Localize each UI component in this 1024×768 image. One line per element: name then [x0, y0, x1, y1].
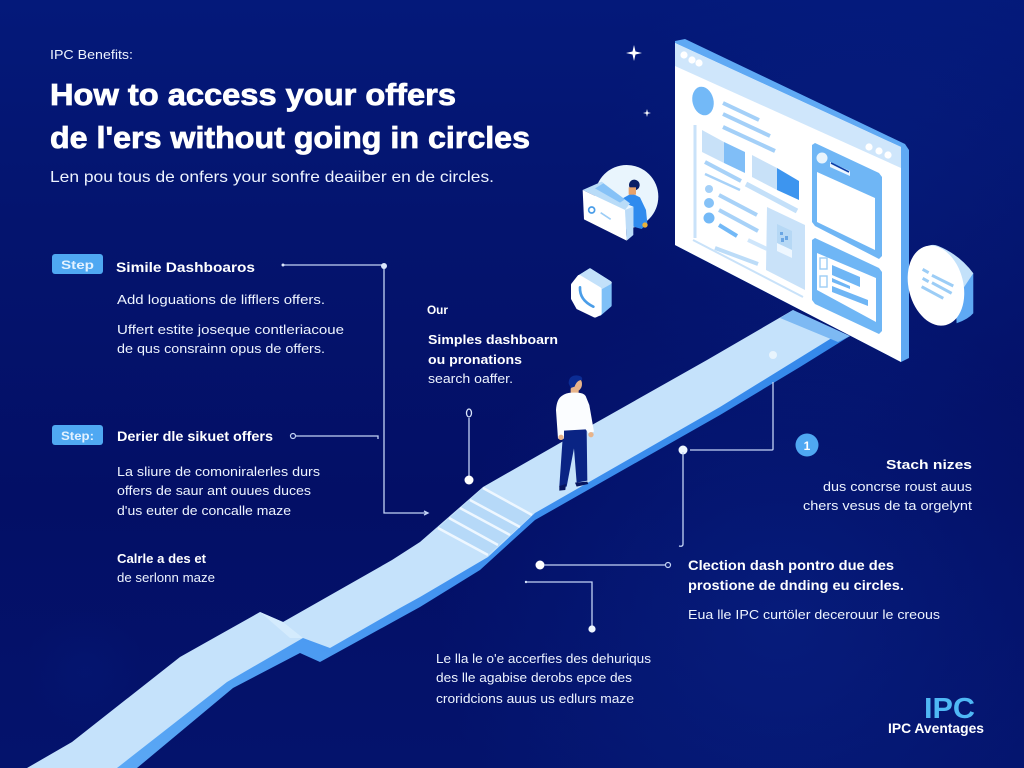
step two text: d'us euter de concalle maze — [117, 503, 291, 518]
title bar dots right — [865, 143, 892, 159]
image tiles — [702, 130, 724, 163]
badge: number one — [796, 434, 818, 456]
text block: centre callout: Our — [427, 303, 448, 317]
lower side card — [812, 238, 882, 334]
step two text: offers de saur ant ouues duces — [117, 483, 312, 498]
text block: bottom callout: Le lla le o'e accerfies des dehuriqus — [436, 651, 652, 666]
connector: step one to path — [282, 263, 428, 515]
title block — [50, 47, 530, 186]
dashboard window — [675, 39, 909, 362]
text block: lower right callout: Eua lle IPC curtöler decerouur le creous — [688, 607, 941, 622]
text block: centre callout: ou pronations — [428, 352, 522, 367]
text block: lower right callout: Clection dash pontro due des — [688, 558, 894, 573]
upper side card — [812, 143, 882, 259]
path side edge — [110, 333, 850, 768]
isometric path — [27, 310, 850, 768]
connector: bottom vertical — [525, 581, 596, 633]
step two badge: Step: — [61, 429, 94, 443]
panel: step one — [52, 254, 344, 356]
title bar dots left — [680, 51, 703, 67]
path seam — [260, 612, 303, 638]
icon: phone tile — [573, 270, 610, 315]
icon: sparkle small — [643, 109, 651, 117]
text block: centre callout: Simples dashboarn — [428, 332, 558, 347]
stair stripes — [438, 488, 532, 555]
logo: IPC: IPC Aventages — [888, 721, 984, 736]
person on path — [556, 375, 594, 491]
connector lines — [282, 263, 777, 633]
step one text — [117, 292, 344, 356]
text block: bottom callout: croridcions auus us edlurs maze — [436, 691, 634, 706]
header lines — [723, 103, 775, 151]
text block: right callout: chers vesus de ta orgelynt — [803, 498, 972, 513]
text block: right callout: dus concrse roust auus — [823, 479, 973, 494]
step one badge: Step — [61, 258, 94, 272]
text block: centre callout — [427, 303, 558, 386]
stair band — [438, 488, 532, 555]
text block: left note — [117, 551, 215, 585]
text block: bottom callout: des lle agabise derobs epce des — [436, 670, 633, 685]
step two badge — [52, 425, 103, 445]
text block: lower right callout: prostione de dnding eu circles. — [688, 578, 904, 593]
icon: sparkle large — [626, 45, 642, 61]
icon: person at card — [583, 165, 658, 241]
text block: lower right callout — [688, 558, 941, 622]
step one heading: Simile Dashboaros — [116, 260, 255, 275]
step two text — [117, 464, 321, 518]
path shadow under window — [780, 310, 850, 342]
eyebrow label: IPC Benefits: — [50, 47, 133, 62]
connector: bottom horizontal — [536, 560, 670, 570]
panel: step two — [52, 425, 321, 518]
subtitle: Len pou tous de onfers your sonfre deaiiber en de circles. — [50, 169, 494, 186]
text block: centre callout: search oaffer. — [428, 371, 513, 386]
frame lines — [693, 125, 803, 297]
icon: chat bubble — [900, 240, 973, 332]
step one text: Add loguations de lifflers offers. — [117, 292, 325, 307]
window front — [675, 43, 901, 362]
heading line 2: de l'ers without going in circles — [50, 120, 530, 155]
badge: number one: 1 — [804, 439, 811, 453]
connector: path to right callouts — [678, 351, 777, 546]
step one text: Uffert estite joseque contleriacoue — [117, 322, 344, 337]
step one badge — [52, 254, 103, 274]
path top surface — [27, 310, 835, 768]
avatar — [689, 84, 717, 118]
window top and side edges — [675, 39, 909, 362]
text block: left note: de serlonn maze — [117, 570, 215, 585]
logo: IPC: IPC — [924, 693, 975, 725]
text block: left note: Calrle a des et — [117, 551, 207, 566]
content lines — [705, 162, 797, 264]
window title bar — [675, 43, 901, 168]
logo: IPC — [888, 693, 984, 736]
step one text: de qus consrainn opus de offers. — [117, 341, 325, 356]
text block: right callout: Stach nizes — [886, 457, 972, 472]
list dots — [704, 185, 714, 224]
connector: centre callout — [464, 409, 474, 484]
text block: right callout — [803, 457, 973, 513]
connector: step two — [290, 434, 378, 439]
step two text: La sliure de comoniralerles durs — [117, 464, 321, 479]
image block with qr — [766, 207, 805, 290]
text block: bottom callout — [436, 651, 652, 706]
heading line 1: How to access your offers — [50, 77, 456, 112]
step two heading: Derier dle sikuet offers — [117, 429, 273, 444]
